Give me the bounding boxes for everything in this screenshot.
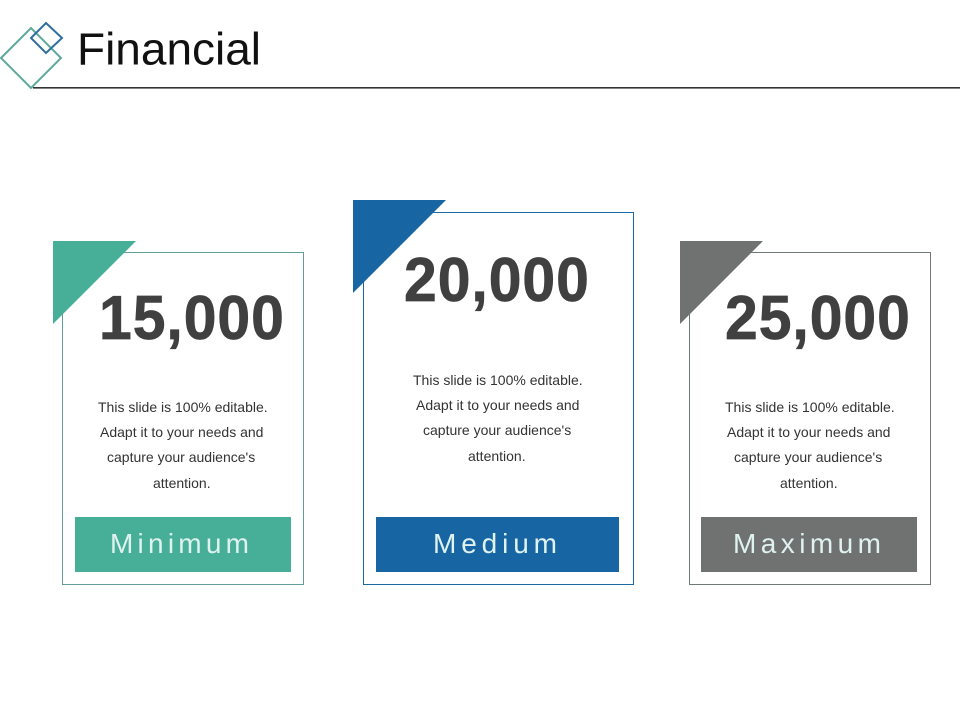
button label: Maximum [733, 528, 881, 559]
corner triangle [353, 200, 446, 293]
value: 25,000 [725, 283, 911, 352]
description: attention. [780, 475, 838, 491]
description: capture your audience's [107, 449, 255, 465]
description: capture your audience's [734, 449, 882, 465]
description: Adapt it to your needs and [100, 424, 263, 440]
panel: minimum [53, 241, 304, 584]
description [98, 399, 268, 491]
description [413, 372, 583, 464]
panel: medium [353, 200, 634, 584]
button [75, 517, 291, 572]
header rule [33, 87, 960, 89]
description: attention. [468, 448, 526, 464]
corner triangle [53, 241, 136, 324]
description: This slide is 100% editable. [413, 372, 583, 388]
description: attention. [153, 475, 211, 491]
description: This slide is 100% editable. [98, 399, 268, 415]
card outline [690, 252, 930, 584]
icon: overlapping diamonds [1, 23, 62, 88]
description [725, 399, 895, 491]
description: Adapt it to your needs and [416, 397, 579, 413]
card outline [62, 252, 304, 584]
value: 20,000 [404, 245, 590, 314]
button label: Minimum [110, 528, 249, 559]
description: capture your audience's [423, 422, 571, 438]
panel: maximum [680, 241, 930, 584]
card outline [364, 212, 634, 584]
button [701, 517, 917, 572]
button [376, 517, 619, 572]
description: Adapt it to your needs and [727, 424, 890, 440]
value: 15,000 [99, 283, 285, 352]
button label: Medium [433, 528, 557, 559]
description: This slide is 100% editable. [725, 399, 895, 415]
corner triangle [680, 241, 763, 324]
title: Financial [77, 24, 261, 74]
